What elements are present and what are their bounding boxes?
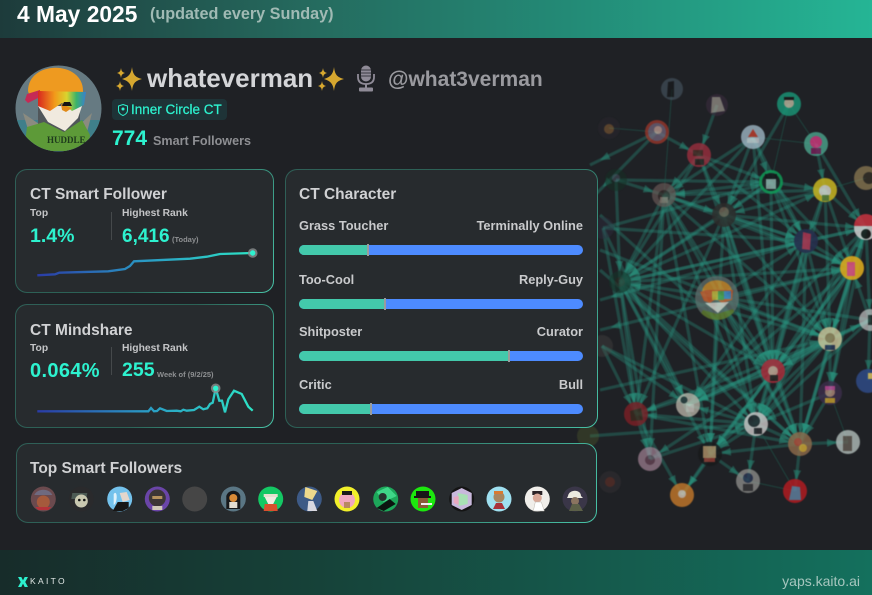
badge text: Inner Circle CT: [131, 102, 222, 117]
trait: shitposter vs curator: Curator: [537, 324, 583, 339]
avatar 14: [525, 486, 550, 512]
profile avatar: [16, 66, 102, 152]
trait: grass toucher vs terminally online: Terminally Online: [477, 218, 583, 233]
avatar 1: [31, 486, 56, 512]
header bar: [0, 0, 872, 38]
label: top: Top: [30, 208, 48, 219]
trait: critic vs bull: Bull: [559, 377, 583, 392]
value: top percent: 1.4%: [30, 225, 74, 247]
trait: too-cool vs reply-guy: [299, 272, 583, 310]
panel: Top Smart Followers: [16, 443, 597, 523]
footer bar: [0, 550, 872, 595]
site url: yaps.kaito.ai: [782, 573, 860, 589]
smart followers label: Smart Followers: [153, 134, 251, 148]
rank note: Week of (9/2/25): [157, 370, 214, 379]
avatar 12: [449, 486, 474, 512]
panel heading: CT Mindshare: [30, 322, 132, 339]
trait: too-cool vs reply-guy: Too-Cool: [299, 272, 354, 287]
panel: CT Character: [285, 169, 598, 428]
thin faint edges: [609, 89, 866, 491]
icon: microphone: [357, 66, 375, 92]
panel heading: CT Character: [299, 186, 396, 203]
label: highest rank: Highest Rank: [122, 343, 188, 354]
kaito wordmark: KAITO: [30, 576, 67, 586]
main avatar node: [695, 276, 739, 320]
value: highest rank: 255: [122, 359, 155, 381]
trait: grass toucher vs terminally online: Grass Toucher: [299, 218, 388, 233]
avatar 5: [182, 486, 207, 512]
network edges: [590, 104, 870, 495]
avatar 9: [334, 486, 360, 512]
icon: kaito logo mark: [18, 577, 28, 587]
avatar 15: [562, 486, 588, 512]
avatar 6: [221, 486, 246, 512]
panel: CT Mindshare: [15, 304, 274, 428]
panel heading: CT Smart Follower: [30, 186, 167, 203]
avatar 7: [258, 486, 283, 512]
trait: shitposter vs curator: Shitposter: [299, 324, 362, 339]
handle: @what3verman: [388, 68, 543, 91]
panel: CT Smart Follower: [15, 169, 274, 293]
network avatars: [577, 78, 872, 507]
sparkline chart: [37, 384, 254, 413]
display name: whateverman: [147, 63, 313, 93]
network graph background: [577, 78, 872, 508]
sparkline chart: [37, 248, 258, 276]
divider: [111, 212, 112, 240]
avatar 11: [410, 486, 436, 512]
icon: shield: [118, 104, 128, 116]
avatar 13: [486, 486, 512, 512]
avatar 2: [69, 486, 94, 512]
badge: Inner Circle CT: [112, 99, 227, 120]
update note: (updated every Sunday): [150, 5, 334, 23]
trait: shitposter vs curator: [299, 324, 583, 362]
divider: [111, 347, 112, 375]
avatar 4: [145, 486, 170, 512]
value: top percent: 0.064%: [30, 360, 100, 382]
icon: sparkles left: [116, 67, 142, 91]
panel heading: Top Smart Followers: [30, 460, 182, 477]
date heading: 4 May 2025: [17, 1, 137, 27]
trait: critic vs bull: Critic: [299, 377, 332, 392]
avatar 10: [373, 486, 398, 512]
trait: critic vs bull: [299, 377, 583, 415]
avatar 8: [297, 486, 322, 512]
avatar 3: [107, 486, 132, 512]
follower avatars row: [30, 486, 588, 512]
rank note: (Today): [172, 235, 199, 244]
label: highest rank: Highest Rank: [122, 208, 188, 219]
smart follower count: 774: [112, 127, 147, 150]
value: highest rank: 6,416: [122, 226, 170, 247]
label: top: Top: [30, 343, 48, 354]
avatar text HUDDLE: HUDDLE: [47, 135, 86, 145]
trait: too-cool vs reply-guy: Reply-Guy: [519, 272, 583, 287]
icon: sparkles right: [318, 67, 344, 91]
trait: grass toucher vs terminally online: [299, 218, 583, 256]
